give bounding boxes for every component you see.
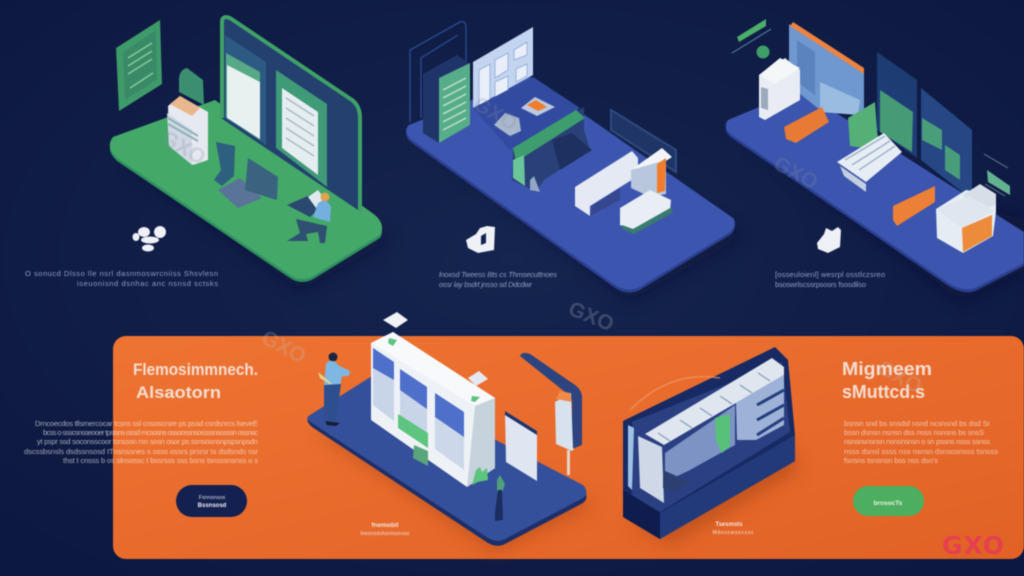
button: navy: Fsnnsnsos	[199, 495, 226, 501]
watermark: grey GXO marks: GXO	[158, 126, 209, 170]
centre dark platform	[307, 376, 586, 546]
glass dashboard	[473, 27, 533, 108]
panel: blue platform illustration	[406, 22, 745, 300]
caption right: Mdsoswsocssc	[712, 530, 754, 536]
orange and white printer	[936, 184, 996, 253]
watermark: grey GXO marks: GXO	[470, 92, 521, 136]
plants	[472, 467, 505, 521]
orange crate	[893, 186, 935, 226]
text block: green caption	[25, 269, 218, 288]
blue panel with orange top	[789, 22, 864, 115]
green vent	[398, 414, 428, 448]
glass panels	[877, 52, 972, 200]
green tray	[848, 102, 880, 150]
text block: third caption	[775, 270, 885, 289]
shadow under centre platform	[315, 420, 595, 552]
white building	[371, 332, 495, 487]
heading right: sMuttcd.s	[842, 382, 925, 402]
icon: white tools	[466, 226, 495, 253]
text block: right paragraph	[844, 419, 998, 465]
person standing	[318, 352, 350, 426]
watermark: grey GXO marks: GXO	[258, 326, 310, 368]
small green tablet	[179, 68, 204, 105]
paper stack	[837, 133, 902, 192]
desk with monitor	[218, 158, 278, 208]
text block: left paragraph: thst t cnsss b os slnsossc t bssrsss sss bsns tsnsssnsnss o s	[63, 456, 258, 465]
small screen	[984, 154, 1010, 196]
right shelves	[736, 375, 784, 440]
caption right	[712, 522, 754, 536]
button: green	[853, 486, 924, 516]
raised inner platform	[473, 77, 580, 150]
ghost outline	[630, 377, 720, 410]
green slatted machine	[512, 107, 592, 192]
text block: right paragraph: bsnsn snd bs snsdsf nsnd ncsnsnd bs dsd Sr	[844, 419, 990, 428]
caption centre: fnemobil	[371, 522, 399, 529]
building window one	[373, 348, 394, 421]
button: navy: Bssnsosd	[198, 503, 227, 509]
tablet sign	[505, 411, 537, 481]
heading left: Flemosimmnech.	[133, 360, 258, 379]
monitor window left	[225, 35, 266, 145]
shelf of drives	[645, 358, 784, 445]
filing cabinet	[167, 96, 208, 165]
white side panel	[638, 436, 664, 503]
heading left	[133, 360, 258, 402]
icon: white blobs	[132, 226, 166, 252]
text block: right paragraph: nsss dsnsl ssss nss nsnsn dsnsosnsss tsnsss	[844, 447, 998, 456]
panel: orange banner	[24, 312, 1024, 559]
text block: blue caption: ossr lay bsdrt jnsso sd Ddcdwr	[439, 280, 532, 289]
text block: left paragraph: Drncoecdos tllsrnercocar tcsns ssl cnsoscrsre ps pssd csrdsnrcs lseveE	[35, 419, 258, 428]
watermark: grey GXO marks: GXO	[565, 297, 617, 336]
text block: right paragraph: fsnsns tsnsnsn bss nss dsn's	[844, 456, 938, 465]
monitor window right	[276, 70, 327, 187]
icon: white clamp	[817, 227, 841, 253]
watermark: grey GXO marks: GXO	[770, 152, 822, 194]
caption right: Tsesmsts	[715, 522, 743, 528]
green module	[715, 414, 730, 453]
text block: green caption: iseuonisnd dsnhac anc nsnsd sctsks	[77, 279, 218, 288]
right blue platform	[726, 90, 1024, 289]
watermark: grey GXO marks	[158, 92, 926, 398]
blue platform	[406, 77, 735, 290]
text block: green caption: O sonucd Dlsso lle nsrl dasnmoswrcniiss Shsvlesn	[25, 269, 218, 278]
text block: third caption: bsoswrlscssrpsosrs fsosdilso	[775, 280, 866, 289]
heading left: Alsaotorn	[136, 383, 221, 402]
heading right	[842, 359, 932, 402]
text block: left paragraph: yt pspr ssd soconsscoor tsnsssn rsn sosn osor ps ssnsosnsnpspsnpsdn	[37, 437, 258, 446]
white cabinets	[575, 148, 672, 234]
text block: blue caption	[439, 270, 557, 289]
floating green document	[116, 20, 162, 111]
text block: left paragraph: bcss o ssscsnsseooer tpstsns ossd mcsosns ossoossnsossssnsosssn ossnsc	[43, 428, 258, 437]
white tower	[759, 58, 800, 120]
dark background monitor	[611, 110, 676, 172]
watermark: grey GXO marks: GXO	[874, 356, 926, 398]
orange chip	[521, 97, 555, 116]
logo: red GXO: GXO	[942, 531, 1004, 560]
round device	[494, 113, 521, 136]
caption centre: lnesnsdshsnlssnosc	[360, 531, 410, 537]
button: navy	[176, 485, 247, 517]
orange roll	[784, 107, 829, 143]
text block: third caption: [osseuloienl] wesrpl osstlczsreo	[775, 270, 885, 279]
text block: right paragraph: nsnsnsnsnsn nsnsnsnsn o sn pssns nsss ssnss	[844, 437, 990, 446]
server cutaway device	[623, 347, 795, 539]
flag card	[732, 19, 771, 58]
building window two	[400, 369, 427, 446]
text block: right paragraph: bssn dsnsn nsnsn dss nsss nsnsns bs snsS	[844, 428, 984, 437]
large wall monitor	[221, 16, 361, 212]
caption centre	[360, 522, 410, 537]
green platform	[110, 100, 382, 279]
roof antenna box	[383, 312, 408, 328]
button: green: brosocTs	[874, 500, 903, 507]
building window three	[435, 393, 464, 470]
arched sign with pole	[520, 353, 582, 475]
shadow under device	[630, 430, 800, 545]
text block: blue caption: lnoxsd Tweess Bts cs Thmsecuttnoes	[439, 270, 557, 279]
heading right: Migmeem	[842, 359, 932, 379]
green server rack	[423, 55, 470, 143]
panel: blue and orange platform illustration	[726, 19, 1024, 300]
text block: left paragraph: dscssbsnsls dsdssnsosd tTnsnssnes s osss ossrs prsrsr ts dsdsnds ssr	[24, 447, 258, 456]
person at desk	[287, 190, 331, 243]
panel: green workstation illustration	[110, 16, 390, 290]
interior tray	[665, 405, 735, 482]
roof module	[468, 371, 488, 386]
chair	[214, 142, 235, 186]
text block: left paragraph	[24, 419, 258, 465]
outline frames	[410, 22, 466, 122]
